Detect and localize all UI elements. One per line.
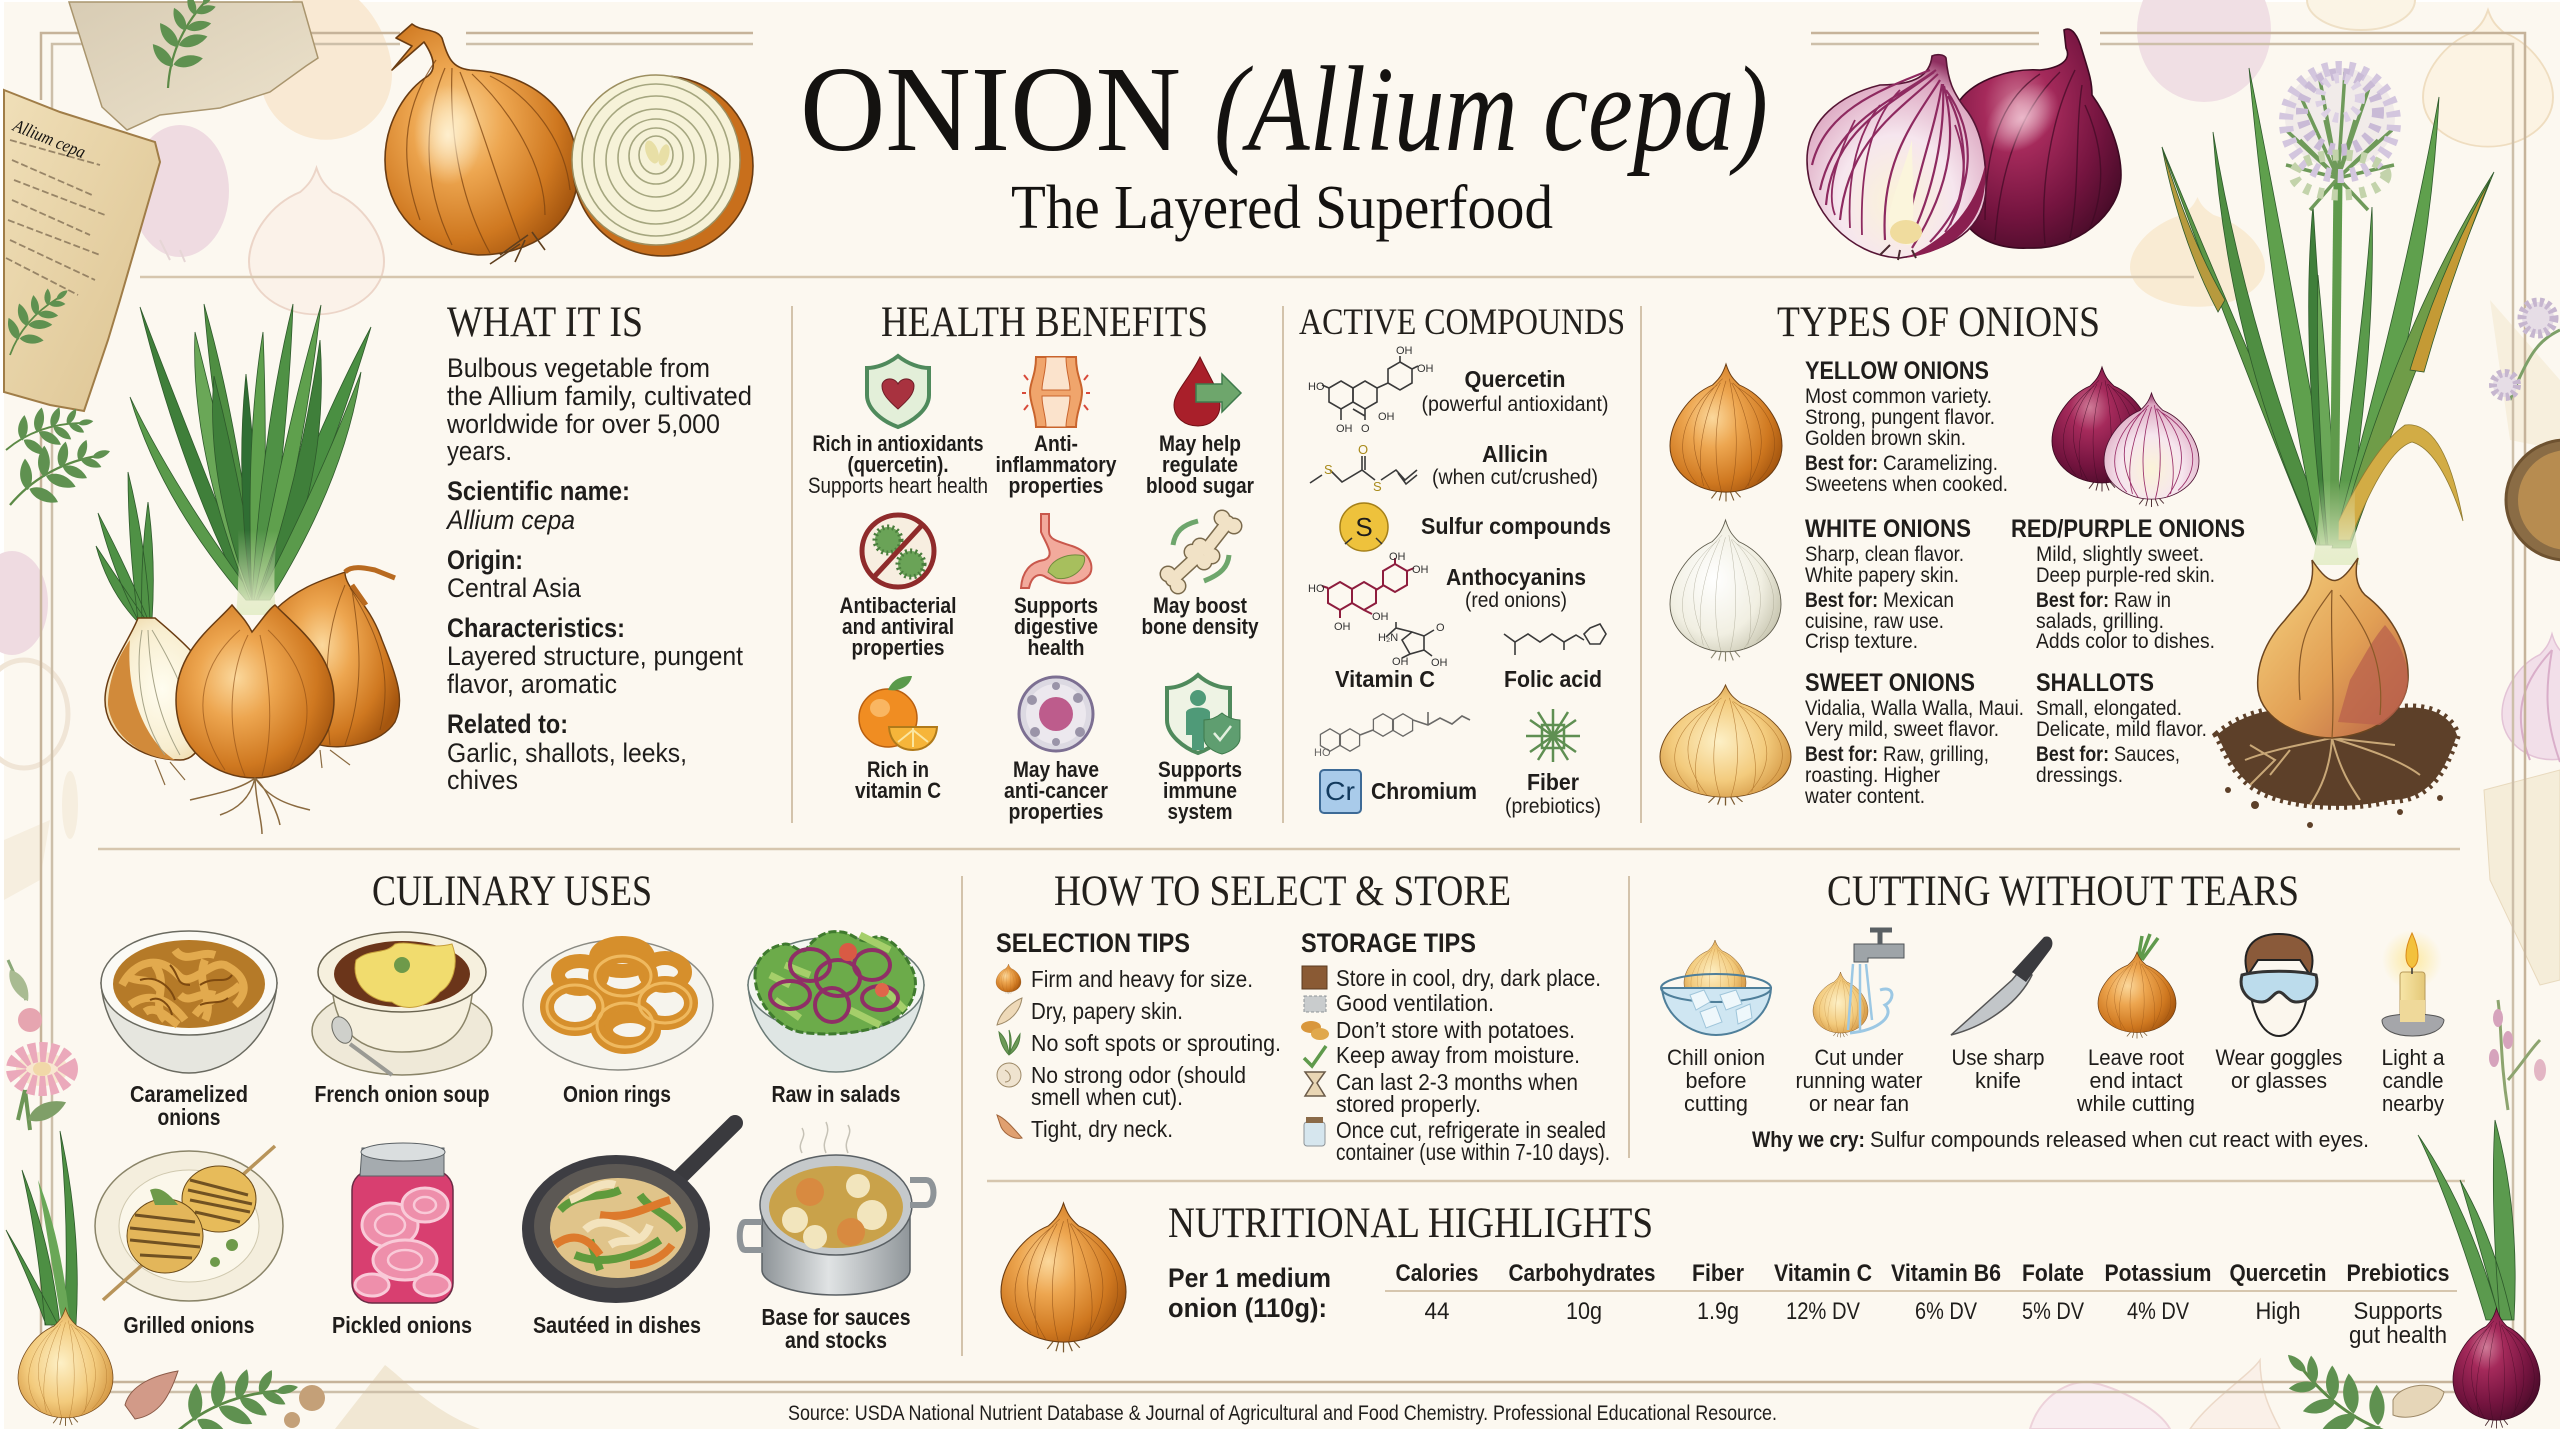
benefit labels row 1: May help xyxy=(1159,431,1241,456)
storage text: container (use within 7-10 days). xyxy=(1336,1139,1610,1165)
illustration: yellow onion whole xyxy=(385,24,578,264)
spice bowl xyxy=(2506,440,2560,560)
nutrition table: High xyxy=(2256,1298,2300,1325)
facts xyxy=(445,476,743,795)
benefit labels row 3: vitamin C xyxy=(855,778,941,803)
food labels row 2: Grilled onions xyxy=(124,1312,254,1338)
nutrition table: 12% DV xyxy=(1786,1298,1860,1325)
icon: joint xyxy=(1022,357,1090,427)
flower head xyxy=(2285,68,2395,210)
icon: onion in ice bowl xyxy=(1661,940,1771,1035)
storage text: Store in cool, dry, dark place. xyxy=(1336,965,1601,991)
nutrition table: 44 xyxy=(1424,1298,1450,1325)
main title: ONION xyxy=(800,42,1181,177)
nutrition table: Fiber xyxy=(1692,1260,1744,1287)
panel: culinary uses xyxy=(95,868,934,1353)
main title xyxy=(800,42,1768,177)
tip labels: candle xyxy=(2382,1068,2444,1093)
leaves xyxy=(2162,68,2494,565)
food: pickled onions jar xyxy=(352,1143,453,1303)
storage tips: STORAGE TIPS xyxy=(1301,928,1476,958)
benefit labels row 3: immune xyxy=(1163,778,1237,803)
icon: chromium element tile: Cr xyxy=(1325,776,1355,806)
illustration: sweet onion xyxy=(1660,685,1791,806)
icon: sprout xyxy=(999,1030,1020,1055)
nutrition table: 4% DV xyxy=(2127,1298,2189,1325)
yellow onions text: Strong, pungent flavor. xyxy=(1805,406,1995,429)
nutrition table: Vitamin B6 xyxy=(1891,1260,2001,1287)
molecule: anthocyanins: OH xyxy=(1389,551,1406,563)
description: Bulbous vegetable from xyxy=(447,353,710,383)
icon: shield with heart xyxy=(867,356,929,427)
tip labels: Light a xyxy=(2382,1045,2445,1070)
selection tips xyxy=(996,928,1281,1142)
shallots text: dressings. xyxy=(2036,764,2123,787)
heading: ACTIVE COMPOUNDS xyxy=(1299,302,1625,343)
nutrition table: Supports xyxy=(2354,1298,2442,1325)
compound label: anthocyanins: (red onions) xyxy=(1465,589,1567,612)
storage text xyxy=(1336,965,1610,1165)
corner decoration bottom-right: red onion and sprigs xyxy=(2259,302,2560,1429)
selection text xyxy=(1031,966,1281,1142)
nutrition table: gut health xyxy=(2349,1322,2447,1349)
storage text: Keep away from moisture. xyxy=(1336,1042,1580,1068)
benefit labels row 1: blood sugar xyxy=(1146,473,1254,498)
benefit labels row 1: inflammatory xyxy=(996,452,1117,477)
benefit labels row 3: May have xyxy=(1013,757,1099,782)
facts: Layered structure, pungent xyxy=(447,641,743,671)
shallots text: SHALLOTS xyxy=(2036,669,2154,697)
molecule: quercetin: HO xyxy=(1308,381,1325,393)
illustration: onion flower plant at right xyxy=(2162,68,2494,828)
compound label: allicin xyxy=(1432,441,1598,489)
selection text: No soft spots or sprouting. xyxy=(1031,1030,1281,1056)
sweet onions text: water content. xyxy=(1804,785,1925,808)
description: worldwide for over 5,000 xyxy=(446,409,720,439)
parchment notes with herbs: Allium cepa xyxy=(10,115,88,162)
illustration: white onion xyxy=(1670,520,1781,661)
description: the Allium family, cultivated xyxy=(447,381,752,411)
benefit labels row 1: regulate xyxy=(1162,452,1238,477)
molecule: vitamin C: O xyxy=(1436,622,1445,634)
compound label: anthocyanins xyxy=(1446,564,1586,612)
facts: Related to: xyxy=(447,709,568,739)
benefit labels row 1: Rich in antioxidants xyxy=(812,431,984,456)
nutrition table: 1.9g xyxy=(1697,1298,1739,1325)
white onions text: Crisp texture. xyxy=(1805,630,1918,653)
icon: fiber xyxy=(1526,709,1580,762)
benefit labels row 3: system xyxy=(1168,799,1232,824)
storage tips xyxy=(1301,928,1610,1165)
panel: active compounds xyxy=(1299,302,1625,818)
icon: no virus xyxy=(862,515,934,587)
icon: potatoes xyxy=(1301,1021,1329,1040)
food labels row 1: onions xyxy=(158,1104,220,1130)
selection text: Firm and heavy for size. xyxy=(1031,966,1253,992)
food labels row 1: Caramelized xyxy=(130,1081,248,1107)
sweet onions text: SWEET ONIONS xyxy=(1805,669,1975,697)
yellow onions text: YELLOW ONIONS xyxy=(1805,357,1989,385)
icon: odor bulb xyxy=(997,1063,1021,1087)
sweet onions text: Very mild, sweet flavor. xyxy=(1805,718,1999,741)
molecule: long chain: HO xyxy=(1314,747,1331,759)
panel: what it is xyxy=(96,299,752,834)
benefit labels row 2: Supports xyxy=(1014,593,1098,618)
shallots text: Small, elongated. xyxy=(2036,697,2182,720)
white onions text: Sharp, clean flavor. xyxy=(1805,543,1964,566)
shallots text: Best for: xyxy=(2036,743,2109,766)
icon: ventilation xyxy=(1304,996,1326,1012)
serving size: onion (110g): xyxy=(1168,1293,1327,1323)
food: sauteed pan xyxy=(522,1123,735,1303)
compound label: quercetin: Quercetin xyxy=(1464,366,1566,392)
main title: (Allium cepa) xyxy=(1214,42,1768,177)
icon: orange xyxy=(859,676,937,750)
tip labels: end intact xyxy=(2090,1068,2182,1093)
white onions text: Best for: xyxy=(1805,589,1878,612)
icon: neck xyxy=(997,1115,1022,1138)
molecule: quercetin: OH xyxy=(1378,411,1395,423)
tip labels: Wear goggles xyxy=(2216,1045,2342,1070)
illustration: yellow onion xyxy=(1670,364,1782,502)
molecule: anthocyanins: OH xyxy=(1334,621,1351,633)
red/purple onions text: salads, grilling. xyxy=(2036,610,2164,633)
benefit labels row 2: and antiviral xyxy=(842,614,954,639)
tip labels xyxy=(1667,1045,2445,1116)
panel: types of onions xyxy=(1660,299,2245,808)
benefit labels row 1: Supports heart health xyxy=(808,473,988,498)
compound label: fiber xyxy=(1505,769,1601,818)
sweet onions text: Best for: xyxy=(1805,743,1878,766)
food labels row 2 xyxy=(124,1304,910,1353)
icon: shield with person xyxy=(1167,675,1240,754)
molecule: quercetin: OH xyxy=(1417,363,1434,375)
compound label: allicin: Allicin xyxy=(1482,441,1548,467)
panel: cutting without tears xyxy=(1661,868,2445,1152)
food: caramelized onions xyxy=(101,931,277,1073)
selection text: smell when cut). xyxy=(1031,1084,1183,1110)
sweet onions text: Raw, grilling, xyxy=(1883,743,1989,766)
panel: how to select and store xyxy=(996,868,1610,1165)
icon: sealed jar xyxy=(1304,1117,1325,1146)
icon: sulfur ball: S xyxy=(1355,512,1373,542)
selection text: Dry, papery skin. xyxy=(1031,998,1183,1024)
food: French onion soup xyxy=(312,932,492,1075)
illustration: yellow onion cut xyxy=(572,75,753,256)
shallots text: Sauces, xyxy=(2114,743,2180,766)
nutrition table: Calories xyxy=(1396,1260,1478,1287)
heading: TYPES OF ONIONS xyxy=(1777,299,2100,346)
compound label: fiber: Fiber xyxy=(1527,769,1579,795)
molecule: vitamin C: H₂N xyxy=(1378,632,1398,644)
storage text: stored properly. xyxy=(1336,1091,1481,1117)
icon: face with goggles xyxy=(2241,934,2317,1036)
corner decoration bottom-left: onion plant and flower xyxy=(5,960,325,1429)
molecule: quercetin xyxy=(1308,345,1434,435)
heading: HOW TO SELECT & STORE xyxy=(1054,868,1511,915)
benefit labels row 2: properties xyxy=(852,635,944,660)
food: stock pot xyxy=(740,1122,934,1295)
food: onion rings xyxy=(523,940,713,1070)
storage text: Can last 2-3 months when xyxy=(1336,1069,1578,1095)
benefit labels row 3: anti-cancer xyxy=(1004,778,1108,803)
molecule: quercetin: O xyxy=(1361,423,1370,435)
icon: hourglass xyxy=(1305,1072,1325,1096)
tip labels: Cut under xyxy=(1814,1045,1904,1070)
yellow onions text xyxy=(1805,357,2008,496)
tip labels: or near fan xyxy=(1809,1091,1909,1116)
nutrition table xyxy=(1385,1260,2457,1349)
facts: Characteristics: xyxy=(447,613,625,643)
icon: onion with sprout xyxy=(2098,934,2176,1038)
molecule: vitamin C: OH xyxy=(1392,656,1409,668)
yellow onions text: Caramelizing. xyxy=(1883,452,1998,475)
selection text: Tight, dry neck. xyxy=(1031,1116,1173,1142)
tip labels: cutting xyxy=(1684,1091,1748,1116)
molecule: vitamin C xyxy=(1378,622,1448,669)
food labels row 1 xyxy=(130,1081,900,1130)
tip labels: Leave root xyxy=(2088,1045,2184,1070)
serving size xyxy=(1168,1263,1331,1323)
benefit labels row 3: Rich in xyxy=(867,757,929,782)
food labels row 1: Onion rings xyxy=(563,1081,671,1107)
compound label: folic acid: Folic acid xyxy=(1504,666,1602,692)
compound label: fiber: (prebiotics) xyxy=(1505,795,1601,818)
icon: check mark xyxy=(1304,1046,1326,1066)
molecule: long chain xyxy=(1314,712,1470,759)
nutrition table: 5% DV xyxy=(2022,1298,2084,1325)
benefit labels row 2: health xyxy=(1028,635,1084,660)
icon: chromium element tile xyxy=(1320,770,1361,813)
selection tips: SELECTION TIPS xyxy=(996,928,1190,958)
icon: small onion xyxy=(996,964,1021,994)
molecule: vitamin C: OH xyxy=(1431,657,1448,669)
illustration: onion xyxy=(1001,1203,1126,1352)
illustration: red onion cut xyxy=(1807,55,1986,260)
panel: nutritional highlights xyxy=(1001,1200,2457,1352)
heading: CULINARY USES xyxy=(372,868,652,915)
why we cry note: Why we cry: xyxy=(1752,1127,1865,1152)
white onions text xyxy=(1805,515,1971,653)
icon: sulfur ball xyxy=(1340,503,1388,551)
tip labels: while cutting xyxy=(2076,1091,2195,1116)
white onions text: cuisine, raw use. xyxy=(1805,610,1944,633)
nutrition table: Prebiotics xyxy=(2346,1260,2450,1287)
molecule: allicin: S xyxy=(1373,479,1382,494)
tip labels: Use sharp xyxy=(1952,1045,2044,1070)
benefit labels row 2: Antibacterial xyxy=(840,593,956,618)
facts: Origin: xyxy=(447,545,523,575)
bulb xyxy=(2258,558,2408,738)
compound label: quercetin xyxy=(1422,366,1608,416)
red/purple onions text xyxy=(2011,515,2245,653)
facts: chives xyxy=(447,765,518,795)
food labels row 2: and stocks xyxy=(785,1327,887,1353)
food labels row 2: Pickled onions xyxy=(332,1312,472,1338)
compound label: vitamin C: Vitamin C xyxy=(1335,666,1435,692)
red/purple onions text: Deep purple-red skin. xyxy=(2036,564,2215,587)
molecule: anthocyanins: HO xyxy=(1308,583,1325,595)
benefit labels row 3 xyxy=(855,757,1242,824)
panel: health benefits xyxy=(808,299,1259,824)
red/purple onions text: RED/PURPLE ONIONS xyxy=(2011,515,2245,543)
icon: bones with arrows xyxy=(1160,510,1242,594)
benefit labels row 1: (quercetin). xyxy=(848,452,948,477)
description xyxy=(446,353,752,466)
molecule: anthocyanins xyxy=(1308,551,1429,633)
benefit labels row 2: May boost xyxy=(1153,593,1248,618)
sweet onions text: roasting. Higher xyxy=(1805,764,1940,787)
yellow onions text: Sweetens when cooked. xyxy=(1805,473,2008,496)
nutrition table: Carbohydrates xyxy=(1508,1260,1656,1287)
food labels row 1: Raw in salads xyxy=(772,1081,900,1107)
heading: NUTRITIONAL HIGHLIGHTS xyxy=(1168,1200,1653,1247)
compound label: sulfur: Sulfur compounds xyxy=(1421,513,1611,539)
heading: WHAT IT IS xyxy=(447,299,643,346)
tip labels: or glasses xyxy=(2231,1068,2327,1093)
benefit labels row 2 xyxy=(840,593,1259,660)
compound label: quercetin: (powerful antioxidant) xyxy=(1422,393,1608,416)
storage text: Once cut, refrigerate in sealed xyxy=(1336,1117,1606,1143)
yellow onions text: Golden brown skin. xyxy=(1805,427,1966,450)
tip labels: running water xyxy=(1796,1068,1922,1093)
compound label: anthocyanins: Anthocyanins xyxy=(1446,564,1586,590)
benefit labels row 2: bone density xyxy=(1142,614,1259,639)
molecule: folic acid xyxy=(1504,624,1606,655)
soil xyxy=(2217,707,2457,828)
red/purple onions text: Mild, slightly sweet. xyxy=(2036,543,2204,566)
food labels row 2: Base for sauces xyxy=(762,1304,910,1330)
shallots text: Delicate, mild flavor. xyxy=(2036,718,2207,741)
storage text: Don’t store with potatoes. xyxy=(1336,1017,1575,1043)
serving size: Per 1 medium xyxy=(1168,1263,1331,1293)
icon: candle xyxy=(2382,930,2444,1036)
description: years. xyxy=(447,436,512,466)
source footer: Source: USDA National Nutrient Database & Journal of Agricultural and Food Chemistry. Professional Educational Resource. xyxy=(788,1402,1777,1425)
icon: papery skin xyxy=(997,998,1022,1025)
nutrition table: Quercetin xyxy=(2230,1260,2326,1287)
facts: Garlic, shallots, leeks, xyxy=(447,738,687,768)
sweet onions text xyxy=(1804,669,2024,808)
illustration: red onion whole xyxy=(1955,29,2121,248)
benefit labels row 1 xyxy=(808,431,1254,498)
icon: blood drop with arrow xyxy=(1174,357,1241,426)
tip labels: Chill onion xyxy=(1667,1045,1765,1070)
sweet onions text: Vidalia, Walla Walla, Maui. xyxy=(1805,697,2024,720)
molecule: quercetin: OH xyxy=(1396,345,1413,357)
facts: Scientific name: xyxy=(447,476,630,506)
food: grilled onions xyxy=(95,1146,283,1301)
red/purple onions text: Best for: xyxy=(2036,589,2109,612)
molecule: anthocyanins: OH xyxy=(1412,564,1429,576)
food labels row 1: French onion soup xyxy=(314,1081,490,1107)
compound label: chromium: Chromium xyxy=(1371,778,1477,804)
parchment notes with herbs xyxy=(0,0,318,528)
icon: knife xyxy=(1951,936,2052,1035)
nutrition table: Folate xyxy=(2022,1260,2084,1287)
nutrition table: 6% DV xyxy=(1915,1298,1977,1325)
yellow onions text: Best for: xyxy=(1805,452,1878,475)
icon: stomach xyxy=(1021,514,1091,588)
benefit labels row 1: Anti- xyxy=(1034,431,1078,456)
white onions text: White papery skin. xyxy=(1805,564,1959,587)
facts: flavor, aromatic xyxy=(447,669,617,699)
molecule: allicin: S xyxy=(1324,462,1333,477)
heading: HEALTH BENEFITS xyxy=(881,299,1208,346)
molecule: anthocyanins: OH xyxy=(1372,611,1389,623)
tip labels: knife xyxy=(1975,1068,2021,1093)
heading: CUTTING WITHOUT TEARS xyxy=(1827,868,2299,915)
food: raw salad xyxy=(748,932,924,1072)
molecule: quercetin: OH xyxy=(1336,423,1353,435)
icon: cabinet xyxy=(1302,966,1327,989)
title block xyxy=(800,42,1768,242)
benefit labels row 3: properties xyxy=(1008,799,1104,824)
molecule: allicin xyxy=(1310,442,1417,494)
nutrition table: Vitamin C xyxy=(1774,1260,1872,1287)
red/purple onions text: Adds color to dishes. xyxy=(2036,630,2215,653)
illustration: three onions with sprouts xyxy=(96,304,400,834)
facts: Allium cepa xyxy=(445,505,575,535)
benefit labels row 3: Supports xyxy=(1158,757,1242,782)
facts: Central Asia xyxy=(447,573,582,603)
yellow onions text: Most common variety. xyxy=(1805,385,1992,408)
benefit labels row 1: properties xyxy=(1008,473,1104,498)
selection text: No strong odor (should xyxy=(1031,1062,1246,1088)
storage text: Good ventilation. xyxy=(1336,990,1494,1016)
shallots text xyxy=(2036,669,2207,787)
benefit labels row 2: digestive xyxy=(1014,614,1098,639)
why we cry note: Sulfur compounds released when cut react with eyes. xyxy=(1870,1127,2369,1152)
red/purple onions text: Raw in xyxy=(2114,589,2171,612)
icon: petri cell xyxy=(1019,677,1093,751)
icon: running water xyxy=(1813,928,1904,1038)
tip labels: nearby xyxy=(2382,1091,2444,1116)
food labels row 2: Sautéed in dishes xyxy=(533,1312,701,1338)
nutrition table: Potassium xyxy=(2104,1260,2212,1287)
molecule: allicin: O xyxy=(1358,442,1368,457)
white onions text: Mexican xyxy=(1883,589,1954,612)
nutrition table: 10g xyxy=(1566,1298,1602,1325)
illustration: red onion pair xyxy=(2052,367,2199,507)
white onions text: WHITE ONIONS xyxy=(1805,515,1971,543)
compound label: allicin: (when cut/crushed) xyxy=(1432,466,1598,489)
tip labels: before xyxy=(1686,1068,1746,1093)
subtitle: The Layered Superfood xyxy=(1011,174,1553,242)
